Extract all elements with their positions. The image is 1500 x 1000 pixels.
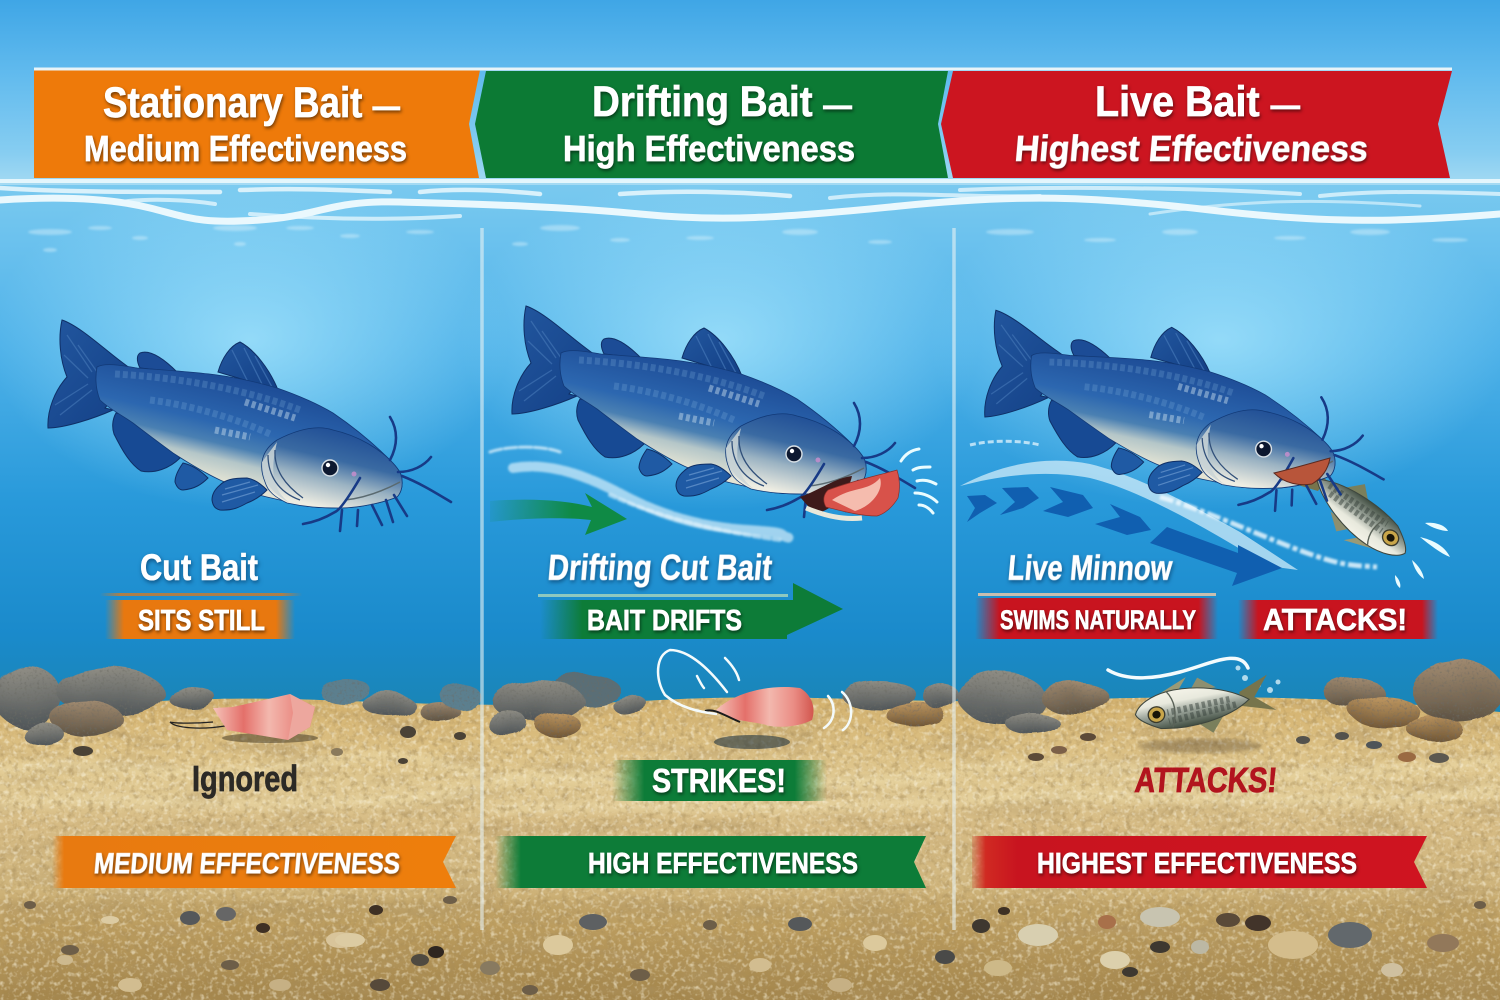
ribbon: medium effectiveness: MEDIUM EFFECTIVENESS: [93, 848, 401, 880]
tag: attacks: [1238, 600, 1438, 639]
bait: cut bait on bottom: [170, 694, 318, 743]
header: stationary bait banner: Stationary Bait —: [103, 79, 400, 127]
surface bubbles haze: [28, 225, 1468, 252]
arrow: green drift arrow: [490, 493, 627, 535]
header: drifting bait banner: Drifting Bait —: [592, 78, 852, 126]
sand darker lower band: [0, 900, 1500, 1000]
label: cut bait: Cut Bait: [140, 547, 258, 588]
bait in catfish mouth: [800, 470, 899, 519]
header top highlight: [34, 68, 1452, 70]
header: drifting bait banner: [475, 71, 948, 178]
sand speckle dark: [0, 697, 1500, 1000]
tag: bait drifts arrow: [538, 583, 843, 639]
header: drifting bait banner: High Effectiveness: [563, 128, 855, 169]
verdict: ignored: Ignored: [192, 758, 298, 799]
label: drifting cut bait: Drifting Cut Bait: [546, 547, 774, 588]
drift swoosh: middle panel: [490, 447, 790, 540]
header: live bait banner: [941, 71, 1452, 178]
sky background: [0, 0, 1500, 190]
header: stationary bait banner: [34, 70, 480, 178]
catfish: stationary panel: [48, 320, 451, 531]
verdict: attacks: ATTACKS!: [1133, 761, 1279, 800]
bait: drifting bait on bottom: [658, 650, 851, 749]
tag: swims naturally: [975, 593, 1218, 639]
panel dividers: [482, 228, 954, 930]
pebbles on sand: [24, 726, 1486, 995]
verdict: strikes: STRIKES!: [652, 762, 786, 799]
minnow on bottom with trail: [1108, 658, 1280, 753]
header: live bait banner: Live Bait —: [1095, 78, 1300, 126]
rocks: right panel: [959, 662, 1500, 741]
water surface waves: [0, 181, 1500, 221]
tag: sits still: [100, 593, 302, 639]
splash marks: live: [1395, 523, 1450, 588]
ribbon: medium effectiveness: [52, 836, 456, 888]
catfish: live panel: [982, 300, 1384, 518]
water light glows: [0, 170, 1500, 510]
rocks: middle panel: [488, 675, 960, 737]
ribbon: highest effectiveness: HIGHEST EFFECTIVENESS: [1037, 848, 1357, 880]
tag: sits still: SITS STILL: [138, 605, 265, 637]
ribbon: high effectiveness: HIGH EFFECTIVENESS: [588, 848, 858, 880]
sand floor: [0, 697, 1500, 1000]
tag: attacks: ATTACKS!: [1263, 602, 1407, 637]
catfish: drifting panel: [512, 306, 915, 517]
ribbon: high effectiveness: [495, 836, 926, 888]
tag: swims naturally: SWIMS NATURALLY: [1000, 605, 1196, 635]
water splash marks: drift: [901, 449, 937, 513]
sand ripples: [0, 755, 1500, 810]
header: live bait banner: Highest Effectiveness: [1013, 128, 1370, 169]
open mouth: live panel: [1274, 458, 1330, 485]
header: stationary bait banner: Medium Effectiveness: [84, 128, 407, 169]
water background: [0, 185, 1500, 715]
arrow: blue chevron arrows: [967, 487, 1282, 586]
ribbon: highest effectiveness: [972, 836, 1427, 888]
minnow in catfish mouth: [1277, 444, 1424, 574]
sand speckle light: [0, 697, 1500, 1000]
swoosh: right panel: [960, 441, 1377, 570]
verdict: strikes: [612, 760, 827, 801]
label: live minnow: Live Minnow: [1006, 549, 1174, 588]
tag: bait drifts arrow: BAIT DRIFTS: [587, 605, 742, 637]
sand banded patches: [0, 697, 1500, 1000]
rocks: left panel: [0, 666, 480, 745]
